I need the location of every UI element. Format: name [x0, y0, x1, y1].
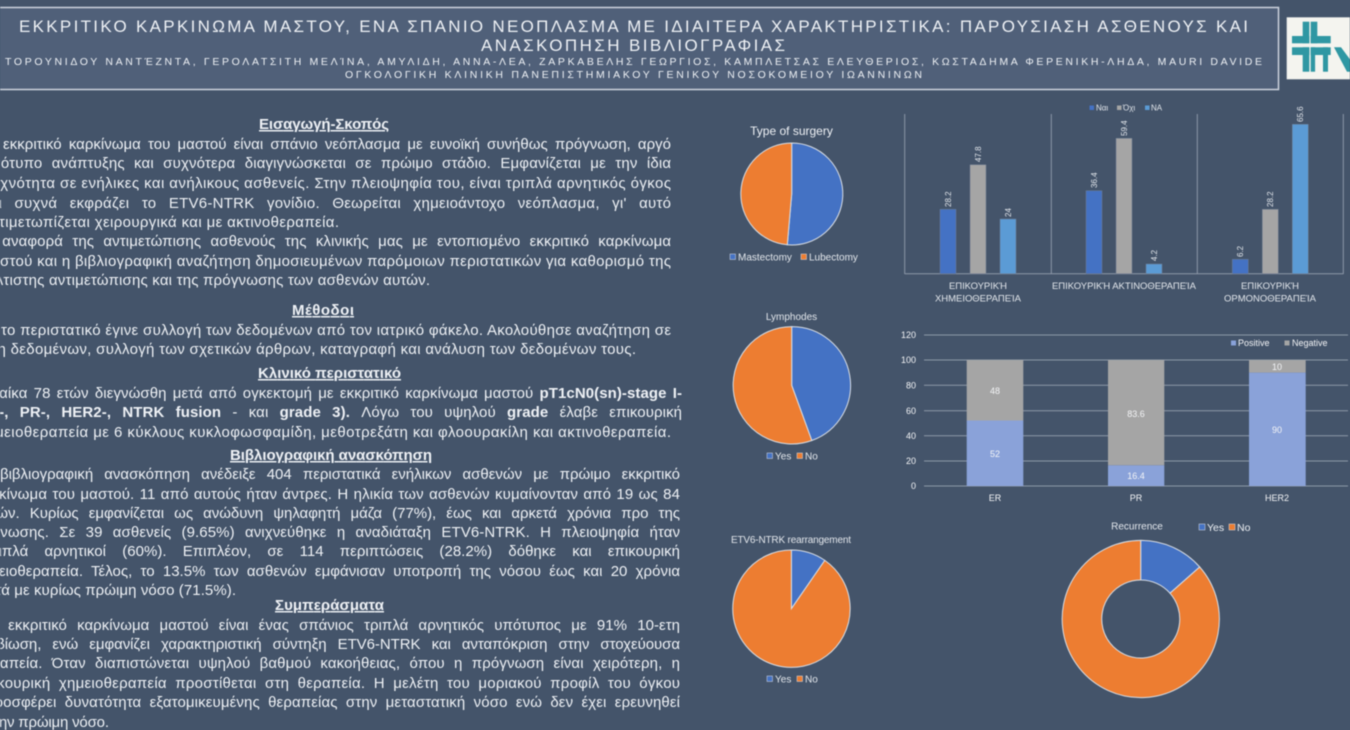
category labels: ΧΗΜΕΙΟΘΕΡΑΠΕΊΑ: [935, 294, 1022, 304]
pie chart: type of surgery: [730, 124, 858, 264]
legend: positive negative: [1231, 338, 1328, 348]
category labels: ΟΡΜΟΝΟΘΕΡΑΠΕΊΑ: [1224, 294, 1317, 304]
bar: HER2: [1249, 360, 1306, 503]
text block: introduction: μαστού και η βιβλιογραφική αναζήτηση δημοσιευμένων παρόμοιων περιστατικών για καθορισμό της: [0, 253, 671, 270]
bar chart: adjuvant therapies: 24: [1004, 208, 1013, 217]
donut chart: recurrence: [1062, 522, 1251, 698]
y axis labels: 60: [906, 406, 916, 416]
text block: introduction: συχνότητα σε ενήλικες και ανήλικους ασθενείς. Στην πλειοψηφία του, είναι τριπλά αρνητικός όγκος: [0, 175, 671, 192]
donut chart: recurrence: Yes: [1207, 522, 1224, 534]
title: ΕΚΚΡΙΤΙΚΟ ΚΑΡΚΙΝΩΜΑ ΜΑΣΤΟΥ, ΕΝΑ ΣΠΑΝΙΟ ΝΕΟΠΛΑΣΜΑ ΜΕ ΙΔΙΑΙΤΕΡΑ ΧΑΡΑΚΤΗΡΙΣΤΙΚΑ: ΠΑΡΟΥΣΙΑΣΗ ΑΣΘΕΝΟΥΣ ΚΑΙ: [19, 17, 1248, 36]
pie chart: lymph nodes: Yes: [775, 452, 791, 462]
section: methods: [0, 302, 671, 358]
pie chart: ETV6-NTRK rearrangement: Yes: [775, 674, 791, 686]
pie chart: ETV6-NTRK rearrangement: ETV6-NTRK rearrangement: [731, 535, 851, 546]
y axis labels: 40: [906, 431, 916, 441]
legend: positive negative: Negative: [1292, 338, 1328, 348]
bar chart: adjuvant therapies: 65.6: [1296, 106, 1305, 122]
title: [19, 17, 1248, 55]
pie chart: type of surgery: Lubectomy: [809, 252, 858, 264]
text block: introduction: Το εκκριτικό καρκίνωμα του μαστού είναι σπάνιο νεόπλασμα με ευνοϊκή συνήθως πρόγνωση, αργό: [0, 136, 671, 153]
bar: PR: PR: [1130, 493, 1143, 503]
authors and affiliation: [5, 56, 1262, 81]
bar: HER2: 90: [1272, 425, 1282, 435]
bar: ER: ER: [989, 493, 1002, 503]
y axis labels: 20: [906, 456, 916, 466]
authors and affiliation: ΤΟΡΟΥΝΙΔΟΥ ΝΑΝΤΈΖΝΤΑ, ΓΕΡΟΛΑΤΣΙΤΗ ΜΕΛΊΝΑ, ΑΜΥΛΙΔΗ, ΑΝΝΑ-ΛΕΑ, ΖΑΡΚΑΒΕΛΗΣ ΓΕΩΡΓΙΟΣ, ΚΑΜΠΛΕΤΣΑΣ ΕΛΕΥΘΕΡΙΟΣ, ΚΩΣΤΑΔΗΜΑ ΦΕΡΕΝΙΚΗ-ΛΗΔΑ, MAURI DAVIDE: [5, 56, 1262, 68]
text block: conclusions: Το εκκριτικό καρκίνωμα μαστού είναι ένας σπάνιος τριπλά αρνητικός υπότυπος με 91% 10-ετη: [0, 617, 680, 634]
bar: PR: 16.4: [1127, 471, 1145, 481]
section: clinical case: [0, 365, 682, 441]
text block: conclusions: προσφέρει δυνατότητα εξατομικευμένης θεραπείας στην μεταστατική νόσο ενώ δεν έχει ερευνηθεί: [0, 694, 681, 711]
category labels: ΕΠΙΚΟΥΡΙΚΉ ΑΚΤΙΝΟΘΕΡΑΠΕΊΑ: [1052, 281, 1197, 292]
category labels: ΕΠΙΚΟΥΡΙΚΉ: [1241, 281, 1299, 292]
text block: introduction: [0, 136, 671, 289]
section: conclusions: [0, 597, 681, 730]
text block: introduction: υπότυπο ανάπτυξης και συχνότερα διαγιγνώσκεται σε πρώιμο στάδιο. Εμφανίζεται με την ίδια: [0, 155, 671, 172]
text block: clinical case: [0, 385, 682, 441]
heading: introduction: Εισαγωγή-Σκοπός: [259, 116, 389, 133]
y axis labels: 100: [901, 355, 916, 365]
bar chart: adjuvant therapies: 4.2: [1150, 249, 1159, 261]
y axis labels: 80: [906, 380, 916, 390]
heading: methods: Μέθοδοι: [292, 302, 354, 319]
header banner: [0, 8, 1278, 90]
text block: methods: [0, 322, 671, 358]
bar chart: adjuvant therapies: 28.2: [944, 191, 953, 207]
category labels: ΕΠΙΚΟΥΡΙΚΉ: [949, 281, 1007, 292]
bar chart: adjuvant therapies: [905, 104, 1343, 304]
bar: ER: 52: [990, 449, 1000, 459]
section: literature review: [0, 447, 680, 599]
legend: yes no NA: NA: [1151, 104, 1163, 112]
pie chart: lymph nodes: [733, 312, 851, 462]
y axis labels: [901, 330, 916, 491]
section: introduction: [0, 116, 671, 289]
bar: ER: [967, 360, 1023, 503]
bar chart: adjuvant therapies: 6.2: [1236, 245, 1245, 257]
pie chart: type of surgery: Type of surgery: [750, 124, 833, 138]
pie chart: ETV6-NTRK rearrangement: [731, 535, 851, 686]
heading: literature review: Βιβλιογραφική ανασκόπηση: [230, 447, 432, 464]
bar: HER2: 10: [1272, 362, 1282, 372]
pie chart: type of surgery: Mastectomy: [738, 252, 792, 264]
legend: yes no NA: Όχι: [1122, 104, 1135, 112]
bar: HER2: HER2: [1265, 493, 1289, 503]
bar chart: adjuvant therapies: 36.4: [1090, 172, 1099, 188]
pie chart: lymph nodes: No: [805, 452, 818, 462]
bar chart: adjuvant therapies: 47.8: [974, 146, 983, 162]
pie chart: lymph nodes: Lymphodes: [766, 312, 817, 323]
text block: literature review: [0, 466, 680, 599]
legend: yes no NA: Ναι: [1096, 104, 1108, 112]
legend: yes no NA: [1090, 104, 1163, 112]
text block: literature review: τριπλά αρνητικοί (60%). Επιπλέον, σε 114 περιπτώσεις (28.2%) δόθηκε και επικουρική: [0, 543, 680, 560]
y axis labels: 120: [901, 330, 916, 340]
y axis labels: 0: [911, 481, 916, 491]
bar: PR: 83.6: [1127, 409, 1145, 419]
donut chart: recurrence: No: [1237, 522, 1251, 534]
text block: introduction: Η αναφορά της αντιμετώπισης ασθενούς της κλινικής μας με εντοπισμένο εκκριτικό καρκίνωμα: [0, 233, 671, 250]
bar: ER: 48: [990, 386, 1000, 396]
bar chart: adjuvant therapies: 28.2: [1266, 191, 1275, 207]
bar: PR: [1108, 360, 1164, 503]
text block: literature review: ετών. Κυρίως εμφανίζεται ως ανώδυνη ψηλαφητή μάζα (77%), έως και αρκετά χρόνια προ της: [0, 505, 680, 522]
pie chart: ETV6-NTRK rearrangement: No: [805, 674, 818, 686]
icon: hospital logo: [1287, 17, 1350, 79]
category labels: [935, 281, 1317, 304]
stacked bar chart: receptors: [901, 330, 1348, 503]
title: ΑΝΑΣΚΟΠΗΣΗ ΒΙΒΛΙΟΓΡΑΦΙΑΣ: [481, 36, 785, 55]
donut chart: recurrence: Recurrence: [1111, 522, 1163, 532]
bar chart: adjuvant therapies: 59.4: [1120, 120, 1129, 136]
authors and affiliation: ΟΓΚΟΛΟΓΙΚΗ ΚΛΙΝΙΚΗ ΠΑΝΕΠΙΣΤΗΜΙΑΚΟΥ ΓΕΝΙΚΟΥ ΝΟΣΟΚΟΜΕΙΟΥ ΙΩΑΝΝΙΝΩΝ: [345, 69, 922, 81]
heading: conclusions: Συμπεράσματα: [275, 597, 385, 614]
text block: introduction: και συχνά εκφράζει το ETV6-NTRK γονίδιο. Θεωρείται χημειοάντοχο νεόπλασμα, γι' αυτό: [0, 195, 671, 212]
heading: clinical case: Κλινικό περιστατικό: [258, 365, 401, 382]
legend: positive negative: Positive: [1238, 338, 1270, 348]
panel: text column: [0, 116, 682, 730]
text block: conclusions: [0, 617, 681, 730]
